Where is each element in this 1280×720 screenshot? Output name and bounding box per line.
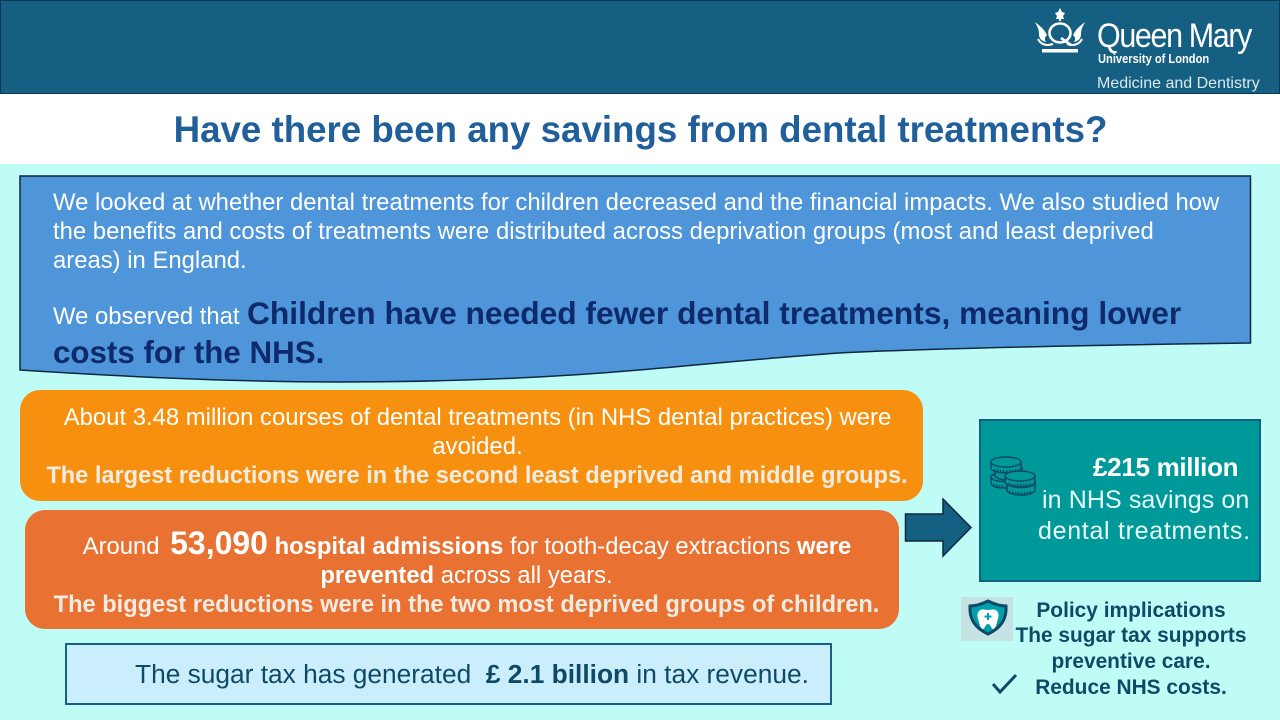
icon: check mark — [992, 674, 1017, 694]
icon: tooth shield — [961, 597, 1013, 641]
savings text — [1038, 486, 1251, 545]
title: Have there been any savings from dental treatments? — [174, 109, 1107, 150]
logo text: University of London — [1098, 51, 1209, 66]
title band — [0, 94, 1280, 164]
icon: coins — [990, 456, 1036, 496]
panel: study summary — [19, 175, 1252, 383]
policy implications text: Reduce NHS costs. — [1035, 676, 1227, 699]
savings text: dental treatments. — [1038, 517, 1251, 545]
header banner — [0, 0, 1280, 94]
arrow — [904, 498, 972, 558]
logo text: Medicine and Dentistry — [1097, 75, 1260, 92]
panel: sugar tax revenue: The sugar tax has generated £ 2.1 billion in tax revenue. — [135, 659, 809, 689]
summary text: areas) in England. — [53, 247, 247, 274]
panel: hospital admissions prevented: Around 53,090 hospital admissions for tooth-decay extractions were — [83, 525, 851, 561]
panel: hospital admissions prevented: prevented across all years. — [320, 562, 613, 589]
panel: hospital admissions prevented: The biggest reductions were in the two most deprived groups of children. — [54, 592, 879, 618]
panel: sugar tax revenue — [65, 643, 832, 705]
panel: dental courses avoided: About 3.48 million courses of dental treatments (in NHS dental practices) were — [64, 404, 891, 431]
policy implications text — [1015, 599, 1246, 699]
logo text: Queen Mary — [1097, 17, 1251, 55]
policy implications text: Policy implications — [1036, 599, 1226, 622]
panel: NHS savings — [979, 419, 1261, 582]
summary text: Children have needed fewer dental treatments, meaning lower — [247, 295, 1181, 331]
panel: hospital admissions prevented — [25, 510, 899, 629]
policy implications text: preventive care. — [1051, 650, 1211, 673]
panel: dental courses avoided — [20, 390, 923, 501]
summary text: We looked at whether dental treatments for children decreased and the financial impacts. We also studied how — [53, 189, 1219, 216]
panel: dental courses avoided: The largest reductions were in the second least deprived and middle groups. — [46, 463, 908, 489]
savings text: in NHS savings on — [1042, 486, 1249, 514]
savings figure: £215 million — [1093, 452, 1238, 482]
logo text — [1097, 17, 1260, 92]
summary text: We observed that — [53, 303, 240, 330]
logo: Queen Mary crest — [1035, 8, 1085, 52]
summary text: the benefits and costs of treatments were distributed across deprivation groups (most and least deprived — [53, 218, 1154, 245]
policy implications text: The sugar tax supports — [1015, 624, 1246, 647]
summary text: costs for the NHS. — [53, 335, 324, 370]
panel: dental courses avoided: avoided. — [432, 433, 523, 460]
summary text — [53, 189, 1220, 370]
